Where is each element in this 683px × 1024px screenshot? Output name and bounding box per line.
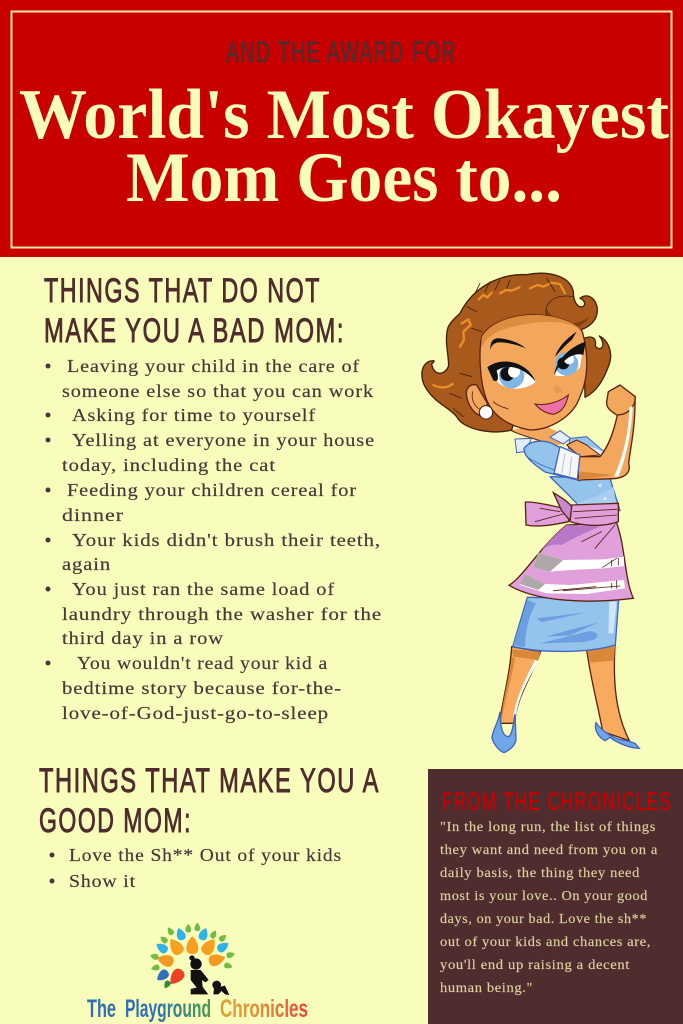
quote text: out of your kids and chances are,: [440, 935, 651, 950]
list: good mom items: Love the Sh** Out of your kids: [69, 845, 342, 865]
illustration: retro mom flexing arm: [422, 273, 639, 753]
logo wordmark: Playground: [125, 995, 211, 1023]
list: bad mom items: Asking for time to yourself: [72, 405, 316, 425]
title: [19, 76, 669, 217]
quote text: "In the long run, the list of things: [440, 820, 656, 835]
logo icon: leaves and parent with baby: [149, 923, 236, 995]
quote text: days, on your bad. Love the sh**: [440, 912, 647, 927]
upper body: hair, face, arm, shirt: [422, 273, 635, 511]
panel: things that make you a good mom: [39, 762, 380, 891]
list: bad mom items: love-of-God-just-go-to-sleep: [62, 703, 329, 723]
logo: the playground chronicles: [87, 923, 308, 1023]
list: bad mom items: You wouldn't read your kid a: [77, 653, 328, 673]
quote text: you'll end up raising a decent: [440, 958, 630, 973]
heading: good mom: GOOD MOM:: [39, 802, 192, 840]
lower body: legs, shoes, skirt, apron: [492, 493, 639, 753]
heading: bad mom: [44, 272, 345, 350]
heading: good mom: THINGS THAT MAKE YOU A: [39, 762, 380, 800]
logo wordmark: The: [87, 995, 116, 1023]
quote text: [440, 820, 658, 996]
list: bad mom items: Yelling at everyone in your house: [72, 430, 375, 450]
list: bad mom items: someone else so that you can work: [62, 381, 374, 401]
quote text: daily basis, the thing they need: [440, 866, 640, 881]
header banner: [0, 0, 683, 257]
list: bad mom items: again: [62, 554, 111, 574]
quote text: most is your love.. On your good: [440, 889, 648, 904]
list: bad mom items: Leaving your child in the care of: [67, 356, 360, 376]
list: bad mom items: [46, 356, 382, 723]
title: World's Most Okayest: [19, 76, 669, 154]
list: bad mom items: You just ran the same load of: [72, 579, 335, 599]
quote text: human being.": [440, 981, 533, 996]
title: Mom Goes to...: [126, 139, 562, 217]
logo wordmark: [87, 995, 308, 1023]
heading: bad mom: MAKE YOU A BAD MOM:: [44, 312, 345, 350]
logo wordmark: Chronicles: [220, 995, 308, 1023]
list: bad mom items: laundry through the washer for the: [62, 604, 382, 624]
list: bad mom items: bedtime story because for-the-: [62, 678, 342, 698]
panel: from the chronicles quote: [428, 769, 683, 1024]
list: bad mom items: Your kids didn't brush their teeth,: [72, 530, 381, 550]
list: bad mom items: today, including the cat: [62, 455, 276, 475]
list: bad mom items: dinner: [62, 505, 124, 525]
heading: bad mom: THINGS THAT DO NOT: [44, 272, 321, 310]
list: bad mom items: third day in a row: [62, 628, 224, 648]
list: bad mom items: Feeding your children cereal for: [67, 480, 357, 500]
list: good mom items: Show it: [69, 871, 136, 891]
header kicker: AND THE AWARD FOR: [226, 36, 457, 69]
panel: things that do not make you a bad mom: [44, 272, 382, 723]
heading: good mom: [39, 762, 380, 840]
list: good mom items: [50, 845, 342, 891]
quote text: they want and need from you on a: [440, 843, 658, 858]
